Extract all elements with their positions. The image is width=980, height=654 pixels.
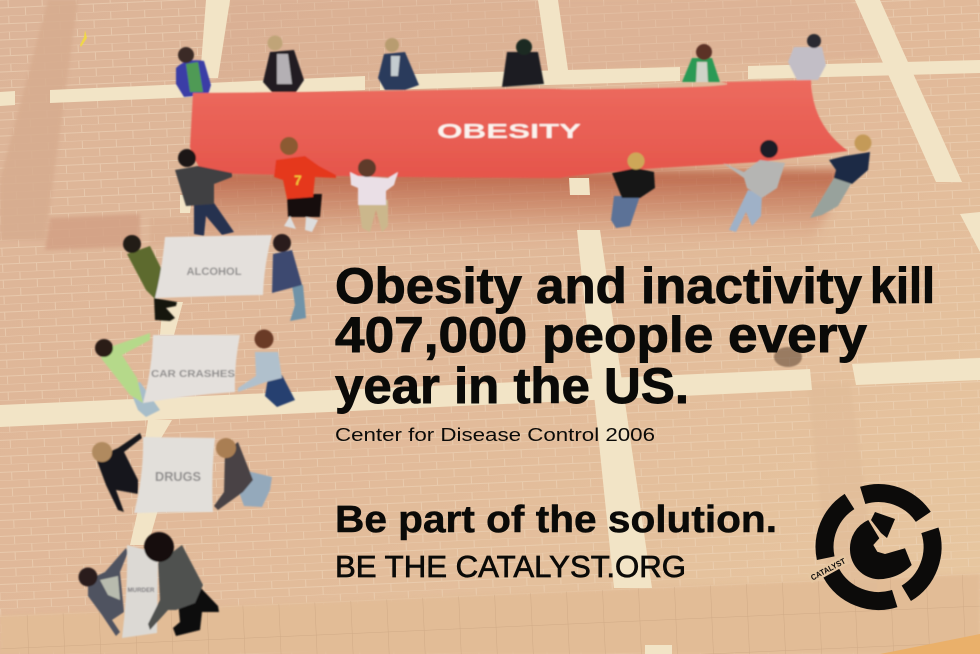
far corner rail bbox=[880, 634, 980, 654]
person: red jersey bbox=[274, 137, 336, 232]
headline bbox=[335, 258, 935, 414]
person: olive shirt bbox=[123, 235, 177, 321]
source line: Center for Disease Control 2006 bbox=[335, 425, 655, 445]
person: black sweatshirt bbox=[502, 39, 544, 87]
banner label: OBESITY bbox=[437, 121, 582, 143]
sign: alcohol bbox=[155, 235, 272, 298]
inner arrow bbox=[871, 512, 895, 538]
person: navy hoodie, grey jeans bbox=[810, 134, 872, 218]
person: dark grey jacket bbox=[144, 532, 219, 636]
person: red jersey: 7 bbox=[294, 172, 302, 188]
sign label: MURDER bbox=[128, 588, 155, 594]
person: grey tee, jeans bbox=[238, 330, 295, 407]
banner: obesity bbox=[190, 80, 848, 178]
photo: banner and participants bbox=[78, 34, 872, 638]
sign label: CAR CRASHES bbox=[151, 368, 235, 380]
headline line 1: Obesity and inactivity bbox=[335, 258, 862, 314]
logo: catalyst bbox=[807, 493, 933, 601]
person: navy hoodie bbox=[378, 38, 419, 90]
headline line 1, last word: kill bbox=[870, 258, 935, 314]
outer ring segments bbox=[825, 493, 933, 601]
sign: drugs bbox=[134, 437, 215, 513]
headline line 2: 407,000 people every bbox=[335, 307, 867, 363]
person: lime top bbox=[95, 333, 160, 417]
sign: car crashes bbox=[143, 335, 240, 403]
website: BE THE CATALYST.ORG bbox=[335, 549, 686, 584]
yellow mark bbox=[80, 30, 87, 47]
person: blue top bbox=[176, 47, 211, 97]
sign: murder bbox=[122, 545, 158, 638]
call to action: Be part of the solution. bbox=[335, 499, 777, 541]
pavement stain bbox=[774, 347, 802, 367]
person: black top, blonde bbox=[611, 152, 655, 228]
person: green jacket bbox=[682, 44, 720, 82]
person: grey tee, cap bbox=[723, 140, 785, 232]
person: grey tee and cap bbox=[788, 34, 826, 80]
headline line 3: year in the US. bbox=[335, 358, 689, 414]
banner shadow on the ground bbox=[190, 170, 845, 250]
person: black jacket, ponytail bbox=[92, 433, 142, 512]
person: black top, long hair bbox=[175, 149, 234, 236]
inner C bbox=[850, 520, 912, 579]
sign label: DRUGS bbox=[155, 469, 201, 484]
person: plaid shirt bbox=[272, 234, 306, 321]
person: black jacket bbox=[263, 36, 304, 92]
logo wordmark: CATALYST bbox=[809, 557, 847, 582]
person: checked shirt bbox=[214, 438, 272, 510]
person: white top bbox=[350, 159, 398, 232]
sign label: ALCOHOL bbox=[186, 266, 242, 278]
person: striped top bbox=[78, 548, 128, 636]
